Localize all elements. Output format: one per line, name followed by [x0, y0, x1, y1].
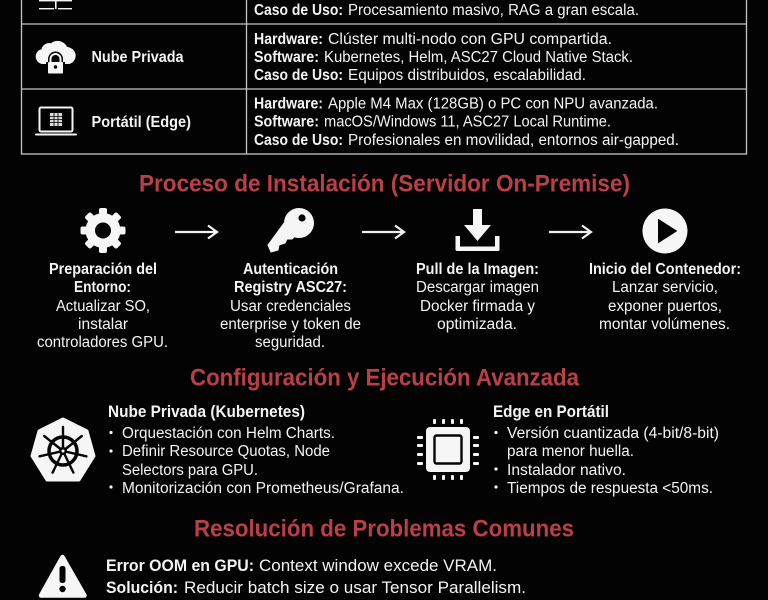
- list: kubernetes bullets: Monitorización con Prometheus/Grafana.: [122, 480, 404, 497]
- step 2 text: [220, 261, 361, 351]
- step 4 text: Inicio del Contenedor:: [589, 261, 741, 278]
- step 3 text: [416, 261, 539, 333]
- row details: Portátil: macOS/Windows 11, ASC27 Local Runtime.: [324, 114, 611, 130]
- arrow 2: [362, 226, 404, 238]
- row details: Nube Privada: Clúster multi-nodo con GPU compartida.: [328, 31, 612, 48]
- row details: Nube Privada: Caso de Uso:: [254, 67, 343, 84]
- step 3: image pull: [416, 209, 539, 333]
- step 2 text: Registry ASC27:: [234, 279, 347, 296]
- icon: play: [642, 208, 688, 254]
- icon: warning triangle: [41, 557, 84, 596]
- row details: Nube Privada: Kubernetes, Helm, ASC27 Cloud Native Stack.: [324, 49, 633, 66]
- icon: gear: [80, 208, 126, 253]
- list: edge bullets: Versión cuantizada (4-bit/8-bit): [507, 425, 719, 442]
- list: kubernetes bullets: [109, 425, 404, 497]
- step 3 text: Docker firmada y: [420, 298, 535, 315]
- step 1: environment preparation: [37, 208, 168, 351]
- step 2: registry authentication: [220, 208, 361, 351]
- row details: Portátil: Caso de Uso:: [254, 132, 343, 149]
- heading: common problems: Resolución de Problemas Comunes: [194, 516, 574, 542]
- step 1 text: controladores GPU.: [37, 334, 168, 351]
- step 2 text: Autenticación: [243, 261, 338, 278]
- panel: deployment table: [21, 0, 747, 154]
- list: edge bullets: para menor huella.: [507, 443, 634, 460]
- list: edge bullets: Tiempos de respuesta <50ms.: [507, 480, 713, 497]
- list: kubernetes bullets: Orquestación con Helm Charts.: [122, 425, 335, 442]
- heading: installation process: Proceso de Instalación (Servidor On-Premise): [139, 170, 630, 198]
- callout: OOM error and solution: Reducir batch size o usar Tensor Parallelism.: [184, 578, 526, 597]
- row details: Nube Privada: [254, 31, 633, 84]
- row details: Portátil: [254, 96, 679, 149]
- callout: OOM error and solution: Solución:: [106, 578, 178, 597]
- step 4 text: exponer puertos,: [608, 298, 722, 315]
- arrow 1: [175, 226, 217, 238]
- block: private cloud kubernetes: [32, 403, 404, 497]
- row details: Portátil: Software:: [254, 114, 319, 130]
- step 4 text: [589, 261, 741, 333]
- row details: Portátil: Apple M4 Max (128GB) o PC con NPU avanzada.: [328, 96, 658, 112]
- step 1 text: instalar: [78, 316, 128, 333]
- row label: Portátil (Edge): Portátil (Edge): [92, 114, 191, 131]
- text: kubernetes heading: Nube Privada (Kubernetes): [108, 403, 305, 421]
- icon: chip: [417, 419, 479, 480]
- row details: Portátil: Profesionales en movilidad, entornos air-gapped.: [348, 132, 679, 149]
- list: kubernetes bullets: Definir Resource Quotas, Node: [122, 443, 330, 460]
- step 1 text: Preparación del: [49, 261, 157, 278]
- step 2 text: seguridad.: [255, 334, 325, 351]
- step 3 text: Descargar imagen: [416, 279, 539, 296]
- icon: server rack fragment: [39, 0, 72, 9]
- row label: Nube Privada: Nube Privada: [92, 49, 184, 66]
- block: edge on laptop: [417, 403, 719, 497]
- icon: cloud with padlock: [36, 41, 76, 76]
- row details: Nube Privada: Software:: [254, 49, 319, 66]
- heading: advanced configuration: Configuración y Ejecución Avanzada: [190, 364, 580, 392]
- callout: OOM error and solution: Error OOM en GPU:: [106, 556, 254, 575]
- step 2 text: enterprise y token de: [220, 316, 361, 333]
- icon: kubernetes wheel: [32, 419, 94, 480]
- step 1 text: [37, 261, 168, 351]
- list: edge bullets: [494, 425, 719, 497]
- callout: OOM error and solution: [106, 556, 526, 597]
- list: kubernetes bullets: Selectors para GPU.: [122, 462, 258, 479]
- icon: key: [268, 208, 314, 252]
- step 3 text: Pull de la Imagen:: [416, 261, 539, 278]
- step 4 text: Lanzar servicio,: [612, 279, 718, 296]
- row text: use case fragment: Caso de Uso:: [254, 2, 343, 19]
- callout: OOM error and solution: Context window excede VRAM.: [259, 556, 497, 575]
- icon: laptop with chip: [35, 108, 77, 136]
- icon: download: [456, 209, 500, 251]
- row details: Nube Privada: Equipos distribuidos, escalabilidad.: [348, 67, 586, 84]
- step 1 text: Actualizar SO,: [56, 298, 150, 315]
- step 4: container start: [589, 208, 741, 333]
- row details: Nube Privada: Hardware:: [254, 31, 323, 48]
- step 2 text: Usar credenciales: [230, 298, 351, 315]
- list: edge bullets: Instalador nativo.: [507, 462, 626, 479]
- step 1 text: Entorno:: [74, 279, 131, 296]
- step 3 text: optimizada.: [437, 316, 517, 333]
- text: edge heading: Edge en Portátil: [493, 403, 609, 421]
- step 4 text: montar volúmenes.: [599, 316, 730, 333]
- row details: Portátil: Hardware:: [254, 96, 323, 112]
- arrow 3: [549, 226, 591, 238]
- row text: use case fragment: Procesamiento masivo, RAG a gran escala.: [348, 2, 639, 19]
